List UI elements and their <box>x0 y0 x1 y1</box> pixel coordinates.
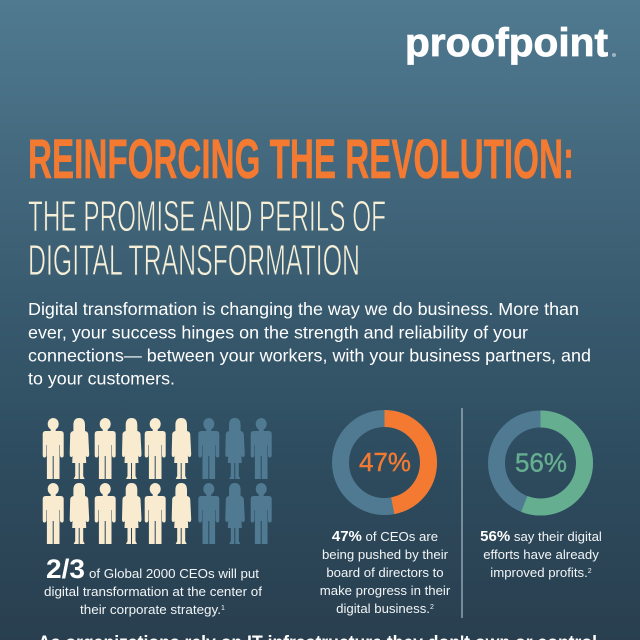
donut chart: 56% <box>496 419 584 507</box>
caption: 47% of CEOs: being pushed by their <box>322 547 449 562</box>
subtitle <box>28 193 386 285</box>
caption: 2/3 of CEOs: digital transformation at the center of <box>44 584 262 599</box>
caption: 47% of CEOs: digital business. <box>336 601 430 616</box>
donut chart: 47%: 47% <box>359 447 411 477</box>
caption: 56% say: efforts have already <box>483 547 599 562</box>
caption: 47% of CEOs <box>320 528 451 616</box>
donut chart: 47% <box>340 418 428 506</box>
caption: 56% say <box>480 528 602 580</box>
intro paragraph: Digital transformation is changing the way we do business. More than <box>28 299 579 319</box>
row 2 people <box>43 483 272 544</box>
caption: 56% say: 56% say their digital <box>480 528 602 545</box>
caption: 47% of CEOs: 47% of CEOs are <box>332 528 438 545</box>
caption: 56% say: improved profits. <box>490 565 588 580</box>
caption: 2/3 of CEOs: 1 <box>221 605 225 612</box>
subtitle: DIGITAL TRANSFORMATION <box>28 237 360 285</box>
caption: 47% of CEOs: 2 <box>430 604 434 611</box>
donut chart: 56%: 56% <box>515 448 567 478</box>
divider <box>461 408 463 618</box>
caption: 2/3 of CEOs: their corporate strategy. <box>80 602 221 617</box>
people pictogram: 2/3 <box>43 418 272 544</box>
row 1 people <box>43 418 272 479</box>
caption: 2/3 of CEOs: of Global 2000 CEOs will put <box>89 566 259 581</box>
caption: 2/3 of CEOs <box>44 554 262 617</box>
caption: 2/3 of CEOs: 2/3 <box>46 554 85 584</box>
caption: 56% say: 2 <box>588 568 592 575</box>
intro paragraph: ever, your success hinges on the strength and reliability of your <box>28 322 528 342</box>
caption: 47% of CEOs: board of directors to <box>326 565 444 580</box>
intro paragraph: connections— between your workers, with your business partners, and <box>28 346 591 366</box>
caption: 47% of CEOs: make progress in their <box>320 583 451 598</box>
intro paragraph <box>28 299 591 388</box>
intro paragraph: to your customers. <box>28 368 175 388</box>
logo: proofpoint: proofpoint <box>405 21 608 65</box>
